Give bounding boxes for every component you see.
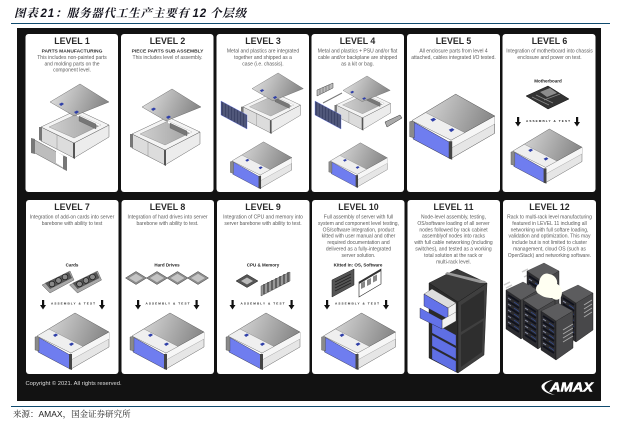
assembled case	[329, 143, 387, 188]
description: Full assembly of server with full	[324, 214, 393, 220]
component label: Cards	[66, 263, 79, 268]
server illustration	[130, 313, 204, 370]
description: switches), and tested as a working	[415, 246, 492, 252]
description: server barebone with ability to test.	[224, 221, 302, 227]
heading: LEVEL 2	[150, 36, 185, 46]
heading: LEVEL 4	[340, 36, 375, 46]
panel: level 9	[217, 200, 310, 374]
description: barebone with ability to test.	[137, 221, 198, 227]
description: total solution at the rack or	[424, 253, 483, 259]
description: with full cable networking (including	[414, 240, 493, 246]
description: PIECE PARTS SUB ASSEMBLY	[132, 48, 204, 54]
assembly and test row: ASSEMBLY & TEST	[51, 302, 95, 306]
add-on cards illustration	[42, 271, 102, 293]
description: delivered as a fully-integrated	[326, 246, 391, 252]
description: validation and optimization. This may	[509, 234, 591, 240]
panel: level 10	[312, 200, 404, 374]
description: Integration of CPU and memory into	[223, 214, 303, 220]
OS and software kit illustration	[332, 269, 381, 297]
description: OpenStack) and networking software.	[508, 253, 591, 259]
exploded case illustration	[221, 73, 303, 134]
server rack illustration	[420, 269, 487, 373]
component label: Motherboard	[534, 79, 562, 84]
description: Integration of motherboard into chassis	[506, 48, 593, 54]
assembly and test row: ASSEMBLY & TEST	[335, 302, 379, 306]
component label: Hard Drives	[154, 263, 180, 268]
kit illustration	[315, 76, 402, 131]
heading: LEVEL 6	[532, 36, 567, 46]
report title: 服务器代工生产主要有	[67, 7, 191, 20]
panel: level 8	[122, 200, 214, 374]
report title: 图表	[14, 7, 39, 20]
source note: 来源：AMAX，国金证券研究所	[13, 409, 131, 420]
copyright note: Copyright © 2021. All rights reserved.	[26, 380, 122, 387]
chassis with lid illustration	[130, 89, 201, 166]
description: Integration of hard drives into server	[127, 214, 208, 220]
description: All enclosure parts from level 4	[419, 48, 488, 54]
assembly and test row	[230, 300, 294, 310]
data center racks and cloud illustration	[504, 263, 593, 360]
component label: Kitted In: OS, Software	[334, 263, 383, 268]
assembly and test row	[324, 300, 389, 310]
panel: level 12	[503, 200, 596, 374]
description: OS/software integration, product	[323, 227, 395, 233]
description: together and shipped as a	[234, 55, 292, 61]
panel: level 3	[216, 34, 309, 192]
description: networking with full softare loading,	[511, 227, 588, 233]
description: as a kit or bag.	[341, 61, 374, 67]
description: include but is not limited to cluster	[512, 240, 587, 246]
description: system and component level testing,	[318, 221, 399, 227]
description: component level.	[53, 68, 91, 74]
description: OS/software loading of all server	[417, 221, 490, 227]
description: featured in LEVEL 11 including all	[512, 221, 587, 227]
description: barebone with ability to test	[42, 221, 103, 227]
heading: LEVEL 7	[54, 202, 90, 212]
panel: level 11	[408, 200, 500, 374]
heading: LEVEL 1	[54, 36, 90, 46]
motherboard illustration	[526, 86, 569, 109]
enclosure illustration	[410, 94, 495, 160]
assembled case	[230, 142, 292, 189]
heading: LEVEL 5	[436, 36, 471, 46]
server illustration	[35, 313, 109, 370]
assembly and test row: ASSEMBLY & TEST	[526, 119, 570, 123]
assembly and test row	[135, 300, 200, 310]
description: Metal and plastics are integrated	[227, 48, 299, 54]
assembly and test row: ASSEMBLY & TEST	[240, 302, 285, 306]
cloud	[536, 274, 562, 300]
description: attached, cables integrated I/O tested.	[411, 55, 496, 61]
server illustration	[226, 313, 300, 370]
CPU and memory illustration	[236, 272, 290, 296]
description: This includes level of assembly.	[133, 55, 202, 61]
description: management, cloud OS (such as	[513, 246, 586, 252]
heading: LEVEL 3	[245, 36, 281, 46]
heading: LEVEL 9	[245, 202, 281, 212]
report title: 21：	[40, 8, 67, 20]
description: This includes non-painted parts	[37, 55, 107, 61]
panel: level 6	[502, 34, 596, 192]
AMAX logo: AMAX	[549, 380, 594, 394]
assembly and test row	[40, 300, 105, 310]
assembly and test row	[515, 117, 580, 126]
description: enclosure and power on test.	[517, 55, 582, 61]
description: nodes followed by rack cabinet	[419, 227, 488, 233]
exploded chassis illustration	[31, 84, 109, 171]
panel: level 2	[121, 34, 214, 192]
description: and molding parts on the	[44, 61, 100, 67]
footer rule	[11, 406, 610, 407]
description: Integration of add-on cards into server	[30, 214, 114, 220]
description: Metal and plastics + PSU and/or flat	[318, 48, 397, 54]
report title: 12	[192, 8, 207, 20]
description: required documentation and	[327, 240, 390, 246]
description: kitted with user manual and other	[322, 234, 396, 240]
description: cable and/or backplane are shipped	[318, 55, 397, 61]
server illustration	[511, 129, 582, 184]
assembly and test row: ASSEMBLY & TEST	[146, 302, 190, 306]
open server drawers	[420, 289, 456, 329]
panel: level 5	[407, 34, 500, 192]
panel: level 4	[312, 34, 404, 192]
description: multi-rack level.	[436, 259, 471, 265]
description: server solution.	[342, 253, 375, 259]
component label: CPU & Memory	[247, 263, 280, 268]
header rule	[11, 23, 610, 24]
description: Rack to multi-rack level manufacturing	[507, 214, 592, 220]
heading: LEVEL 10	[338, 202, 379, 212]
hard drives illustration	[126, 272, 208, 284]
report title: 个层级	[210, 7, 248, 20]
panel: level 7	[26, 200, 118, 374]
panel: level 1	[26, 34, 118, 192]
heading: LEVEL 11	[434, 202, 474, 212]
server illustration	[322, 313, 396, 370]
description: Node-level assembly, testing,	[421, 214, 486, 220]
heading: LEVEL 8	[150, 202, 185, 212]
description: case (i.e. chassis).	[242, 61, 284, 67]
AMAX logo	[541, 380, 594, 395]
description: PARTS MANUFACTURING	[42, 48, 103, 54]
heading: LEVEL 12	[529, 202, 570, 212]
description: assemblyof nodes into racks	[422, 234, 486, 240]
